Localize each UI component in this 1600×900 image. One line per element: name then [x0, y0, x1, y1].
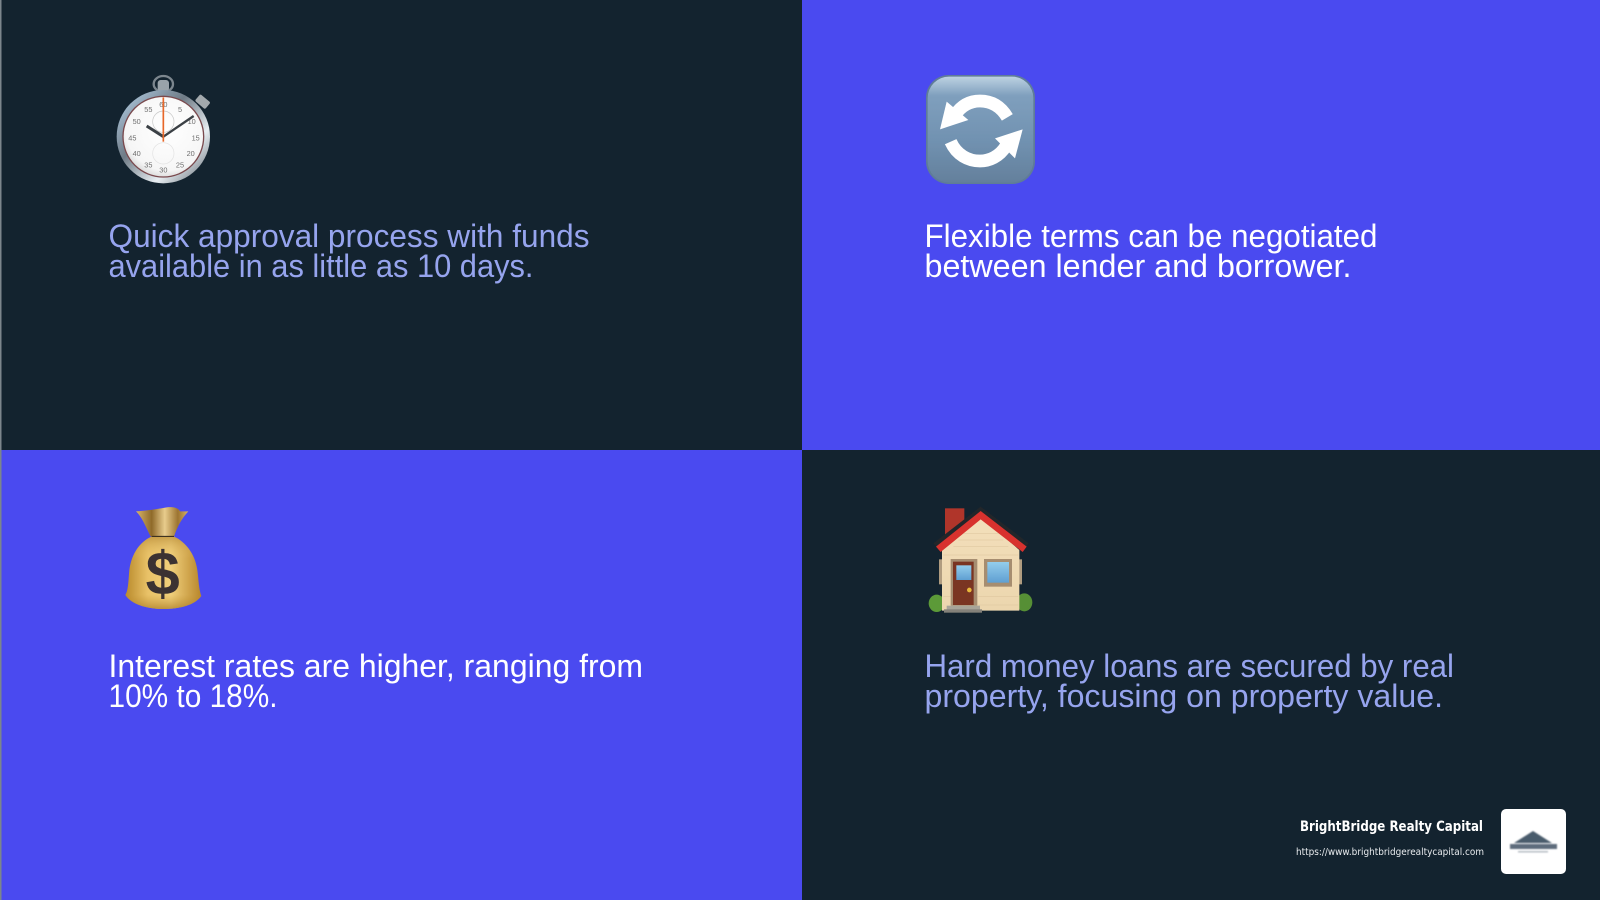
icon: stopwatch: 30 — [159, 166, 167, 175]
text: quick approval: Quick approval process with funds — [108, 218, 590, 254]
panel: secured by property — [802, 450, 1600, 900]
text: interest rates: 10% to 18%. — [108, 678, 278, 714]
left edge strip — [0, 0, 2, 900]
panel: flexible terms — [802, 0, 1600, 450]
text: quick approval — [108, 218, 590, 284]
text: quick approval: available in as little as 10 days. — [108, 248, 534, 284]
text: secured by property: Hard money loans are secured by real — [924, 648, 1454, 684]
text: flexible terms — [924, 218, 1378, 284]
icon: stopwatch: 10 — [188, 117, 196, 126]
icon: stopwatch — [117, 76, 211, 183]
icon: refresh arrows — [926, 75, 1035, 184]
icon: stopwatch: 15 — [192, 133, 200, 142]
icon: money bag — [125, 507, 201, 609]
logo tile — [1501, 809, 1566, 874]
brand url: https://www.brightbridgerealtycapital.com — [1296, 847, 1484, 858]
text: flexible terms: between lender and borrower. — [924, 248, 1352, 284]
icon: stopwatch: 5 — [178, 105, 182, 114]
text: flexible terms: Flexible terms can be negotiated — [924, 218, 1378, 254]
icon: stopwatch: 60 — [159, 100, 167, 109]
icon: stopwatch: 55 — [144, 105, 152, 114]
panel: quick approval — [0, 0, 802, 450]
panel: interest rates — [0, 450, 802, 900]
icon: stopwatch: 40 — [133, 149, 141, 158]
icon: stopwatch: 25 — [176, 161, 184, 170]
text: interest rates — [108, 648, 643, 714]
icon: house — [929, 507, 1032, 613]
text: secured by property — [924, 648, 1454, 714]
icon: stopwatch: 20 — [187, 149, 195, 158]
icon: money bag: $ — [146, 539, 180, 608]
icon: stopwatch: 50 — [133, 117, 141, 126]
brand name: BrightBridge Realty Capital — [1300, 819, 1483, 835]
text: interest rates: Interest rates are higher, ranging from — [108, 648, 643, 684]
text: secured by property: property, focusing on property value. — [924, 678, 1443, 714]
logo mark — [1510, 831, 1557, 852]
icon: stopwatch: 45 — [128, 133, 136, 142]
brand block — [1296, 809, 1566, 874]
icon: stopwatch: 35 — [144, 161, 152, 170]
